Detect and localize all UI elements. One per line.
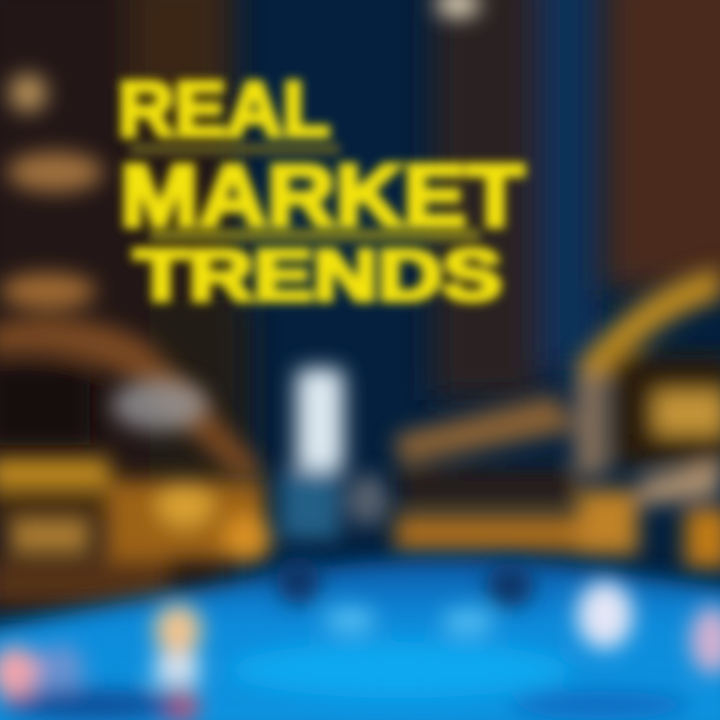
center tower xyxy=(432,0,602,400)
left building xyxy=(0,0,250,610)
blue water foreground xyxy=(0,559,720,720)
faint yellow bands between title lines xyxy=(130,143,480,242)
reflected white glow panels xyxy=(112,0,480,540)
left lower storefronts xyxy=(0,458,272,605)
title line: market: MARKET xyxy=(120,146,524,245)
right building xyxy=(604,0,720,290)
right lower storefronts xyxy=(395,268,720,568)
left building lights xyxy=(0,74,265,480)
title line: real: REAL xyxy=(118,65,330,153)
foreground dark shapes and light reflections xyxy=(0,556,720,720)
title line: trends: TRENDS xyxy=(134,236,502,316)
title xyxy=(118,65,524,316)
